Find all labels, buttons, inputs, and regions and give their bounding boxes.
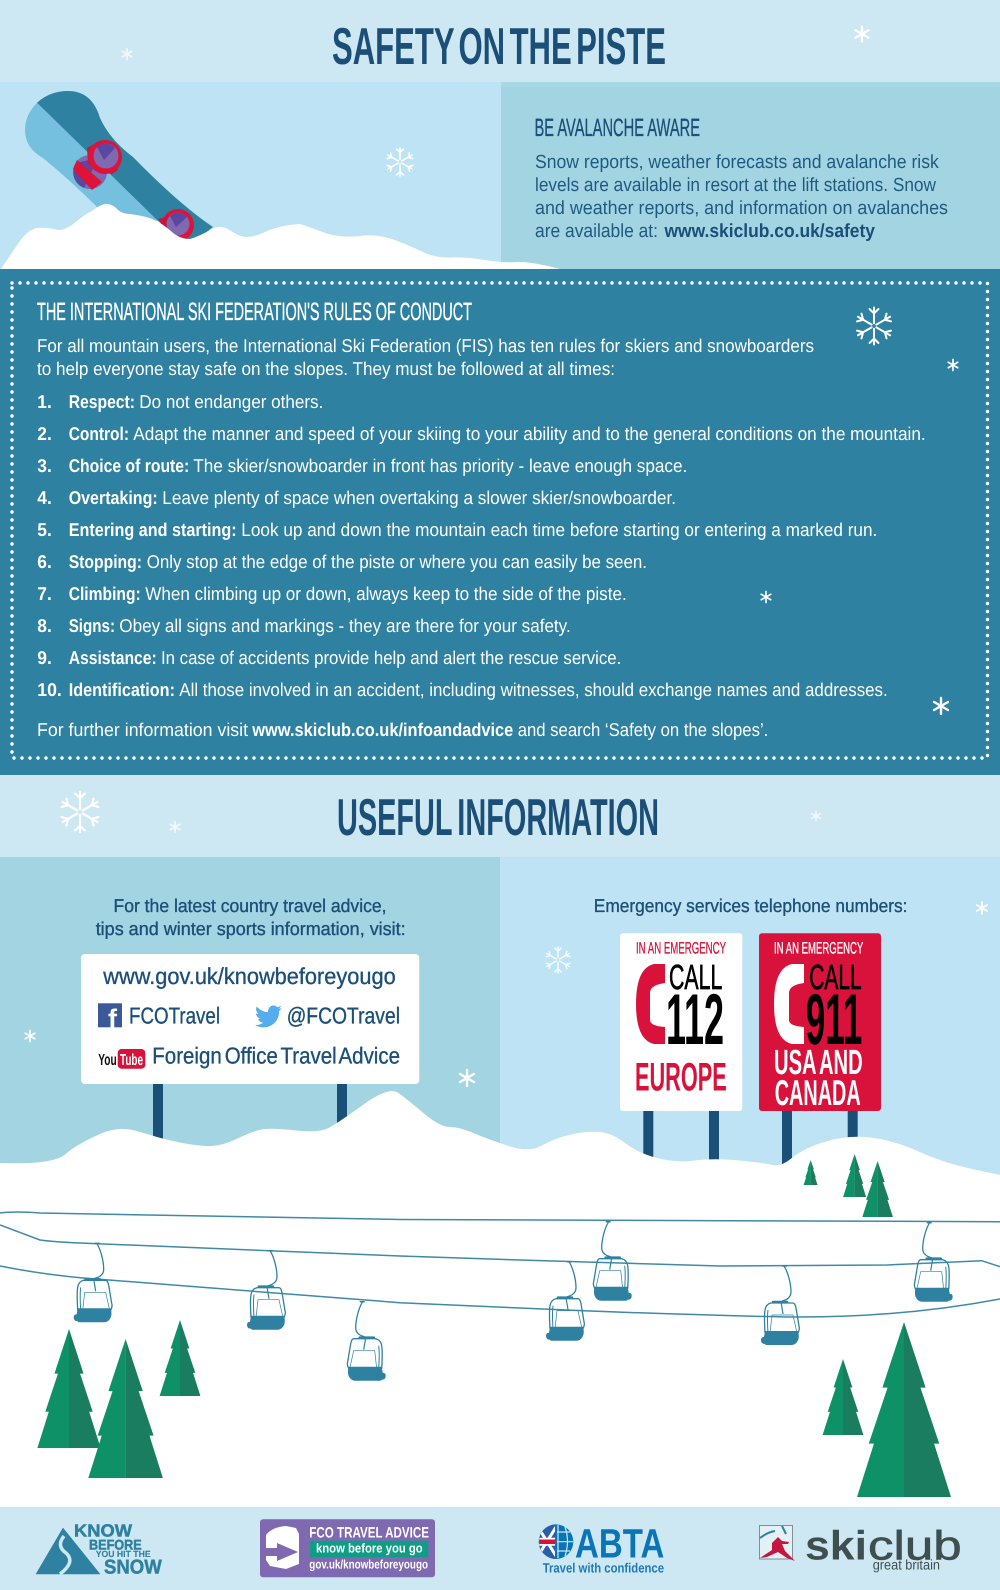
further information line: and search ‘Safety on the slopes’. (518, 719, 768, 740)
logo: fco travel advice (260, 1519, 435, 1577)
heading text: Emergency services telephone numbers: (594, 895, 908, 916)
logo: abta: Travel with confidence (543, 1561, 664, 1576)
intro text: to help everyone stay safe on the slopes. They must be followed at all times: (37, 358, 615, 379)
title: SAFETY ON THE PISTE (332, 18, 666, 76)
rule 9: 9. (37, 647, 52, 668)
logo: fco travel advice: gov.uk/knowbeforeyougo (309, 1557, 428, 1571)
rule 10: 10. (37, 679, 62, 700)
sign: usa and canada 911: IN AN EMERGENCY (774, 939, 863, 957)
logo: abta: ABTA (575, 1520, 664, 1566)
trees: lower right group (823, 1322, 951, 1497)
icon: snow star (977, 902, 987, 914)
panel: snowboard illustration (0, 82, 560, 269)
rule 6: Stopping: (69, 551, 142, 572)
chairlift gondolas (74, 1222, 953, 1381)
logo: know before you hit the snow: KNOW (74, 1520, 133, 1540)
icon: facebook: f (108, 1004, 118, 1034)
icon: snow star (934, 698, 948, 714)
youtube channel: Foreign Office Travel Advice (152, 1042, 400, 1068)
intro text: For all mountain users, the International Ski Federation (FIS) has ten rules for skiers and snowboarders (37, 335, 814, 356)
icon: small snow star (122, 48, 132, 60)
website address: www.gov.uk/knowbeforeyougo (102, 963, 396, 989)
icon: youtube: Tube (120, 1052, 143, 1069)
header band: useful information (0, 775, 1000, 857)
header band: safety on the piste (0, 0, 1000, 82)
logo: ski club great britain: ski (805, 1522, 867, 1568)
icon: snowflake (545, 947, 571, 973)
rule 1: Respect: (69, 391, 135, 412)
sign: europe 112 (620, 933, 742, 1111)
icon: twitter (255, 1006, 282, 1027)
sign: usa and canada 911: USA AND (774, 1043, 863, 1082)
rule 10: Identification: (69, 679, 175, 700)
rule 5: Look up and down the mountain each time before starting or entering a marked run. (241, 519, 877, 540)
icon: small snow star (812, 811, 820, 821)
logo: know before you hit the snow: SNOW (104, 1557, 162, 1579)
intro text (96, 895, 406, 939)
rule 8: 8. (37, 615, 52, 636)
rule 10: All those involved in an accident, including witnesses, should exchange names and addresses. (179, 679, 888, 700)
rule 9: In case of accidents provide help and alert the rescue service. (161, 647, 621, 668)
sign: usa and canada 911: CANADA (775, 1072, 861, 1113)
rule 1 (37, 391, 323, 412)
rule 3: The skier/snowboarder in front has priority - leave enough space. (193, 455, 687, 476)
rule 8: Signs: (69, 615, 115, 636)
sign: usa and canada 911 (759, 933, 881, 1113)
panel: rules of conduct (0, 269, 1000, 775)
icon: snowflake (856, 308, 892, 344)
intro text: tips and winter sports information, visit: (96, 918, 406, 939)
logo: know before you hit the snow (36, 1520, 162, 1579)
icon: snow star (855, 26, 869, 42)
sign: usa and canada 911: CALL (809, 958, 862, 997)
icon: snow star (761, 592, 771, 602)
logo: fco travel advice: FCO TRAVEL ADVICE (309, 1525, 429, 1542)
rule 2: 2. (37, 423, 52, 444)
logo: ski club great britain: club (868, 1522, 962, 1568)
logo: abta (538, 1524, 664, 1573)
rule 5: Entering and starting: (69, 519, 237, 540)
intro text (37, 335, 814, 379)
logo: ski club great britain (760, 1522, 962, 1572)
trees: upper right group (804, 1154, 893, 1217)
sign posts (153, 1084, 347, 1144)
further information line: For further information visit (37, 719, 248, 740)
title: USEFUL INFORMATION (337, 789, 659, 847)
further information line: www.skiclub.co.uk/infoandadvice (251, 719, 513, 740)
rule 8: Obey all signs and markings - they are there for your safety. (119, 615, 571, 636)
logo: fco travel advice: know before you go (316, 1540, 423, 1556)
further information line (37, 719, 768, 740)
paragraph (535, 152, 948, 242)
icon: snow star (460, 1070, 474, 1086)
footer band with partner logos (0, 1507, 1000, 1590)
rule 3: Choice of route: (69, 455, 189, 476)
rule 7: When climbing up or down, always keep to the side of the piste. (145, 583, 627, 604)
rule 7: 7. (37, 583, 52, 604)
panel: be avalanche aware (501, 82, 1000, 269)
rule 4: 4. (37, 487, 52, 508)
icon: telephone handset (774, 964, 804, 1044)
paragraph: Snow reports, weather forecasts and avalanche risk (535, 152, 939, 173)
snow drift (1, 204, 560, 269)
paragraph: are available at: (535, 221, 658, 242)
icon: youtube (98, 1049, 145, 1069)
panel: travel advice (0, 857, 500, 1177)
sign: europe 112: EUROPE (635, 1056, 727, 1100)
paragraph: and weather reports, and information on avalanches (535, 198, 948, 219)
icon: snowflake (60, 792, 100, 832)
sign: europe 112: 112 (666, 980, 724, 1060)
rule 6: 6. (37, 551, 52, 572)
intro text: For the latest country travel advice, (114, 895, 386, 916)
rule 1: 1. (37, 391, 52, 412)
sign: usa and canada 911: 911 (806, 980, 862, 1060)
rule 6: Only stop at the edge of the piste or where you can easily be seen. (147, 551, 647, 572)
snowfield (0, 1091, 1000, 1507)
rule 1: Do not endanger others. (139, 391, 323, 412)
sign posts (643, 1111, 858, 1173)
panel: emergency numbers (500, 857, 1000, 1187)
facebook handle: FCOTravel (129, 1002, 220, 1028)
trees: lower left group (37, 1320, 200, 1478)
rule 2: Adapt the manner and speed of your skiing to your ability and to the general conditions on the mountain. (133, 423, 926, 444)
rule 4: Overtaking: (69, 487, 158, 508)
icon: snowboard (25, 91, 213, 245)
sign: europe 112: IN AN EMERGENCY (636, 939, 726, 957)
icon: snowflake (386, 148, 414, 176)
paragraph: levels are available in resort at the lift stations. Snow (535, 175, 936, 196)
logo: know before you hit the snow: BEFORE (89, 1536, 142, 1552)
paragraph: www.skiclub.co.uk/safety (664, 221, 875, 242)
icon: facebook (98, 1003, 122, 1034)
icon: telephone handset (636, 964, 665, 1044)
sign: europe 112: CALL (669, 958, 722, 997)
twitter handle: @FCOTravel (287, 1002, 400, 1028)
icon: youtube: You (98, 1052, 117, 1069)
rule 4: Leave plenty of space when overtaking a slower skier/snowboarder. (162, 487, 676, 508)
rule 7: Climbing: (69, 583, 141, 604)
chairlift cables (0, 1212, 1000, 1317)
icon: small snow star (170, 822, 180, 832)
rule 2: Control: (69, 423, 129, 444)
sign: contact details (81, 954, 419, 1084)
heading: BE AVALANCHE AWARE (534, 114, 700, 142)
rule 3: 3. (37, 455, 52, 476)
rule 5: 5. (37, 519, 52, 540)
icon: snow star (25, 1030, 35, 1042)
rule 9: Assistance: (69, 647, 157, 668)
icon: snow star (948, 360, 958, 370)
logo: know before you hit the snow: YOU HIT THE (96, 1549, 151, 1559)
heading: THE INTERNATIONAL SKI FEDERATION'S RULES OF CONDUCT (37, 298, 472, 326)
logo: ski club great britain: great britain (873, 1556, 940, 1572)
